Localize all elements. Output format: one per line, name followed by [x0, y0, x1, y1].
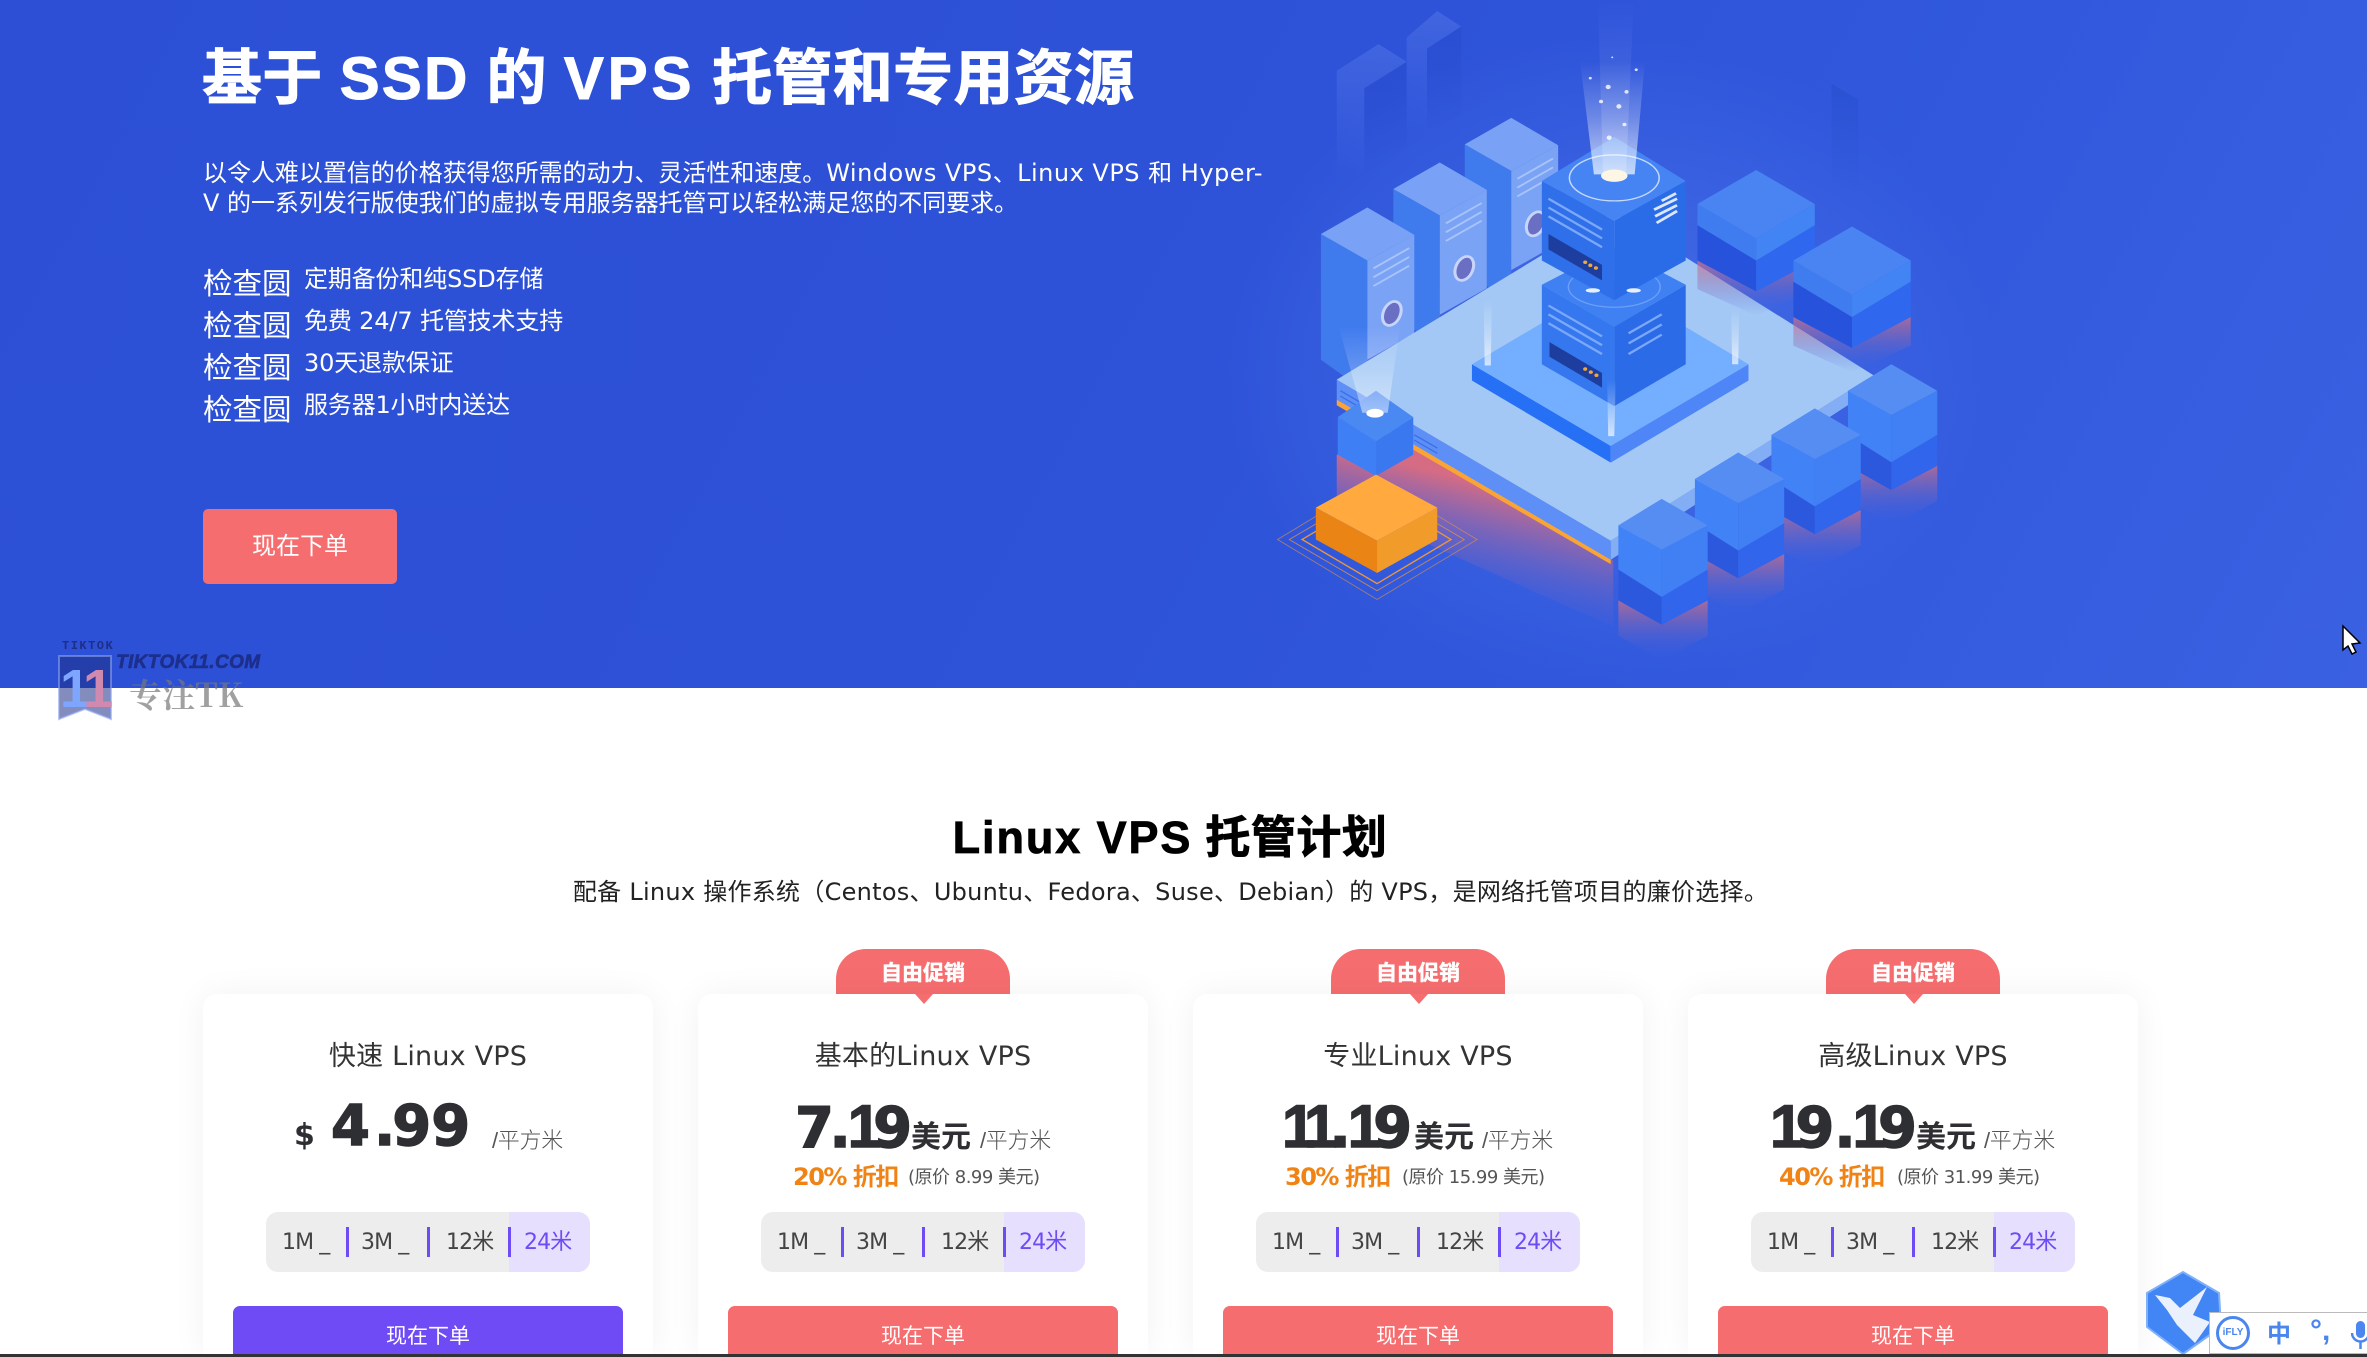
upper server [1542, 137, 1686, 300]
discount [1779, 1163, 2040, 1191]
intro paragraph [203, 159, 1263, 217]
watermark badge [58, 655, 113, 720]
watermark small text: TIKTOK [62, 639, 114, 653]
price: 11.19 [1282, 1093, 1412, 1161]
language indicator: 中 [2267, 1314, 2291, 1349]
price [1770, 1093, 2055, 1161]
price: /平方米 [492, 1128, 563, 1153]
term tabs [1256, 1212, 1580, 1272]
mouse cursor [2342, 624, 2362, 655]
plan name: 快速 Linux VPS [329, 1041, 527, 1072]
term tabs: 3M _ [856, 1230, 903, 1255]
term tabs [1751, 1212, 2075, 1272]
watermark domain: TIKTOK11.COM [116, 652, 260, 673]
feature list: 服务器1小时内送达 [304, 391, 510, 419]
term tabs [761, 1212, 1085, 1272]
price: 美元 [1916, 1112, 1976, 1156]
promo pointer [915, 994, 933, 1004]
term tabs [266, 1212, 590, 1272]
discount [1285, 1163, 1545, 1191]
icon: microphone [2351, 1321, 2367, 1349]
background glow [1220, 35, 1996, 689]
price: $ [294, 1118, 315, 1153]
feature list [203, 261, 563, 429]
promo badge: 自由促销 [881, 957, 965, 987]
panel: plan card pro [1193, 994, 1643, 1354]
feature list: 检查圆 [203, 303, 292, 345]
input method toolbar [2209, 1312, 2367, 1354]
glowing posts [1484, 300, 1739, 366]
term tabs: 24米 [2009, 1230, 2056, 1255]
term tabs: 12米 [446, 1230, 493, 1255]
order button: 现在下单 [881, 1320, 965, 1350]
glow post front [1607, 380, 1616, 436]
term tabs: 3M _ [1351, 1230, 1398, 1255]
term tabs: 24米 [524, 1230, 571, 1255]
term tabs: 12米 [1931, 1230, 1978, 1255]
panel: plan card fast [203, 994, 653, 1354]
front storage blocks [1618, 364, 1937, 660]
promo badge [1826, 949, 2000, 994]
price: 美元 [911, 1112, 971, 1156]
red glow under platform [1337, 444, 1613, 627]
panel: plan card premium [1688, 994, 2138, 1354]
icon: iFLY: iFLY [2223, 1327, 2243, 1338]
promo pointer [1410, 994, 1428, 1004]
term tabs: 3M _ [361, 1230, 408, 1255]
term tabs: 24米 [1514, 1230, 1561, 1255]
icon: iFLY [2216, 1316, 2250, 1350]
price: /平方米 [980, 1128, 1051, 1153]
intro paragraph: V 的一系列发行版使我们的虚拟专用服务器托管可以轻松满足您的不同要求。 [203, 189, 1018, 217]
bottom edge bar [0, 1354, 2367, 1357]
watermark badge: 1 [60, 659, 90, 719]
watermark logo [58, 639, 261, 720]
order button [203, 509, 397, 584]
order button: 现在下单 [1376, 1320, 1460, 1350]
price: /平方米 [1482, 1128, 1553, 1153]
price: 7.19 [795, 1093, 912, 1161]
order button: 现在下单 [386, 1320, 470, 1350]
illustration: isometric server platform [1276, 11, 1938, 648]
discount: (原价 15.99 美元) [1402, 1167, 1545, 1188]
order button [233, 1306, 623, 1354]
discount [793, 1163, 1040, 1191]
order button [1223, 1306, 1613, 1354]
price [294, 1094, 563, 1159]
price: 美元 [1414, 1112, 1474, 1156]
hero banner [0, 0, 2367, 688]
feature list: 检查圆 [203, 345, 292, 387]
term tabs: 1M _ [1272, 1230, 1319, 1255]
order button: 现在下单 [252, 526, 348, 561]
plan name: 专业Linux VPS [1323, 1041, 1513, 1072]
discount: (原价 8.99 美元) [908, 1167, 1040, 1188]
term tabs: 12米 [941, 1230, 988, 1255]
small cube with beam [1338, 327, 1413, 476]
term tabs: 1M _ [1767, 1230, 1814, 1255]
plan name: 基本的Linux VPS [815, 1041, 1031, 1072]
ghost buildings [1337, 11, 1858, 194]
term tabs: 1M _ [777, 1230, 824, 1255]
feature list: 检查圆 [203, 387, 292, 429]
discount: 20% 折扣 [793, 1163, 898, 1191]
watermark badge: 1 [83, 659, 113, 719]
price [1282, 1093, 1553, 1161]
section subtitle: 配备 Linux 操作系统（Centos、Ubuntu、Fedora、Suse、Debian）的 VPS，是网络托管项目的廉价选择。 [573, 878, 1768, 906]
term tabs: 3M _ [1846, 1230, 1893, 1255]
promo badge [1331, 949, 1505, 994]
feature list: 免费 24/7 托管技术支持 [304, 307, 563, 335]
heading: 基于 SSD 的 VPS 托管和专用资源 [202, 45, 1134, 112]
plan name: 高级Linux VPS [1818, 1041, 2008, 1072]
platform [1337, 212, 1873, 564]
intro paragraph: 以令人难以置信的价格获得您所需的动力、灵活性和速度。Windows VPS、Linux VPS 和 Hyper- [203, 159, 1263, 187]
feature list: 定期备份和纯SSD存储 [304, 265, 543, 293]
order button [728, 1306, 1118, 1354]
punctuation indicator: °, [2310, 1314, 2330, 1347]
feature list: 检查圆 [203, 261, 292, 303]
server towers [1321, 118, 1558, 393]
term tabs: 1M _ [282, 1230, 329, 1255]
discount: (原价 31.99 美元) [1897, 1167, 2040, 1188]
light beam with particles [1580, 0, 1645, 182]
orange box with rings [1278, 475, 1477, 600]
promo badge: 自由促销 [1871, 957, 1955, 987]
term tabs: 12米 [1436, 1230, 1483, 1255]
lower server [1542, 247, 1686, 406]
discount: 30% 折扣 [1285, 1163, 1390, 1191]
icon: hexagon bird [2146, 1271, 2222, 1354]
order button [1718, 1306, 2108, 1354]
section title: Linux VPS 托管计划 [953, 812, 1387, 863]
price [795, 1093, 1051, 1161]
inner platform [1472, 283, 1748, 463]
promo badge: 自由促销 [1376, 957, 1460, 987]
price: /平方米 [1984, 1128, 2055, 1153]
order button: 现在下单 [1871, 1320, 1955, 1350]
price: 19.19 [1770, 1093, 1917, 1161]
term tabs: 24米 [1019, 1230, 1066, 1255]
discount: 40% 折扣 [1779, 1163, 1884, 1191]
panel: plan card basic [698, 994, 1148, 1354]
watermark slogan: 专注TK [129, 670, 243, 717]
right storage blocks [1697, 170, 1911, 372]
promo badge [836, 949, 1010, 994]
promo pointer [1905, 994, 1923, 1004]
feature list: 30天退款保证 [304, 349, 454, 377]
price: 4.99 [331, 1094, 470, 1159]
